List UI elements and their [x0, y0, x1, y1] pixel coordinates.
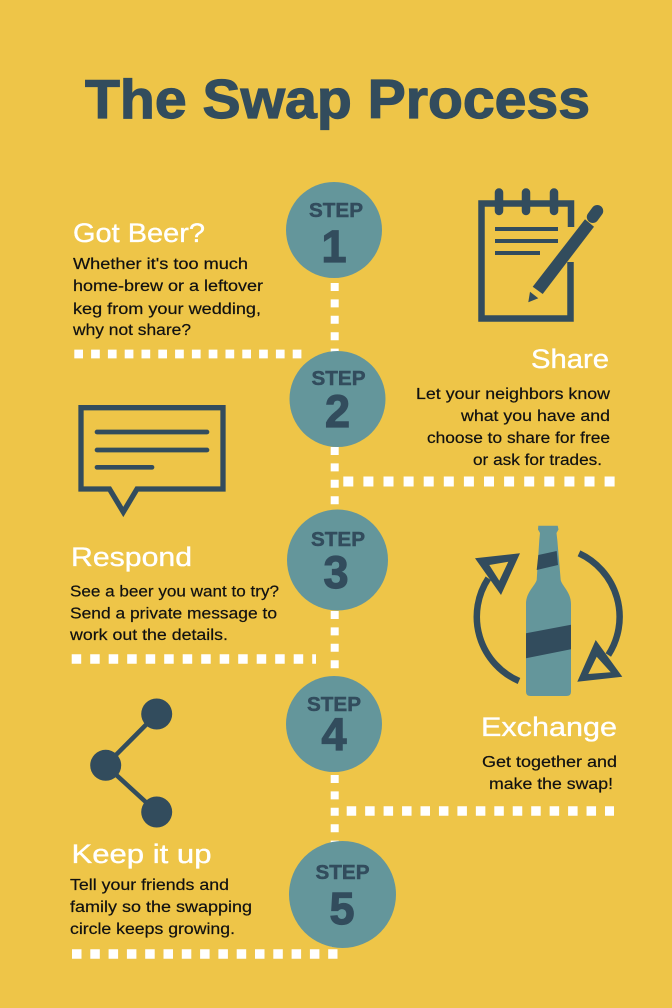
- step 5 badge: STEP: [316, 861, 370, 884]
- text block: respond: See a beer you want to try?: [70, 584, 279, 600]
- panel: exchange: [475, 526, 622, 793]
- title: The Swap Process: [85, 68, 590, 130]
- step 4 badge: 4: [321, 709, 347, 760]
- text block: keep it up: family so the swapping: [70, 899, 252, 916]
- panel: respond: [69, 408, 279, 644]
- text block: exchange: [482, 754, 617, 793]
- text block: share: or ask for trades.: [473, 452, 602, 469]
- text block: share: [416, 386, 611, 469]
- step 2 badge: [290, 351, 386, 447]
- text block: exchange: make the swap!: [489, 776, 613, 793]
- panel: keep it up: [70, 698, 252, 938]
- step 1 badge: 1: [321, 221, 347, 272]
- text block: respond: [69, 584, 279, 644]
- text block: got beer: why not share?: [72, 322, 191, 339]
- text block: respond: work out the details.: [69, 627, 228, 644]
- text block: share: Let your neighbors know: [416, 386, 611, 403]
- step 4 badge: STEP: [307, 693, 361, 716]
- step 1 badge: STEP: [309, 199, 363, 222]
- step 4 badge: [286, 676, 382, 772]
- text block: share: choose to share for free: [427, 430, 610, 447]
- text block: got beer: keg from your wedding,: [73, 301, 261, 318]
- step 2 badge: 2: [325, 386, 350, 437]
- text block: got beer: [72, 256, 263, 339]
- heading: got beer: Got Beer?: [73, 218, 205, 248]
- text block: share: what you have and: [460, 408, 610, 425]
- panel: share: [416, 192, 611, 469]
- step 3 badge: [287, 510, 388, 610]
- text block: got beer: Whether it's too much: [73, 256, 248, 273]
- step 3 badge: STEP: [311, 528, 365, 551]
- step 5 badge: 5: [329, 883, 355, 934]
- text block: respond: Send a private message to: [70, 605, 277, 622]
- heading: share: Share: [531, 344, 609, 374]
- heading: keep it up: Keep it up: [72, 839, 212, 869]
- icon: share nodes: [90, 698, 172, 828]
- text block: keep it up: circle keeps growing.: [70, 921, 235, 938]
- step 3 badge: 3: [323, 547, 349, 598]
- panel: got beer: [72, 218, 263, 339]
- text block: exchange: Get together and: [482, 754, 617, 771]
- heading: exchange: Exchange: [481, 712, 617, 742]
- icon: notepad and pencil: [482, 192, 597, 318]
- text block: keep it up: Tell your friends and: [70, 877, 229, 894]
- icon: speech bubble: [81, 408, 223, 512]
- step 1 badge: [286, 182, 382, 278]
- heading: respond: Respond: [71, 542, 192, 572]
- text block: got beer: home-brew or a leftover: [73, 278, 263, 295]
- step 5 badge: [289, 841, 396, 948]
- icon: bottle with swap arrows: [475, 526, 622, 696]
- step 2 badge: STEP: [312, 367, 366, 390]
- text block: keep it up: [70, 877, 252, 938]
